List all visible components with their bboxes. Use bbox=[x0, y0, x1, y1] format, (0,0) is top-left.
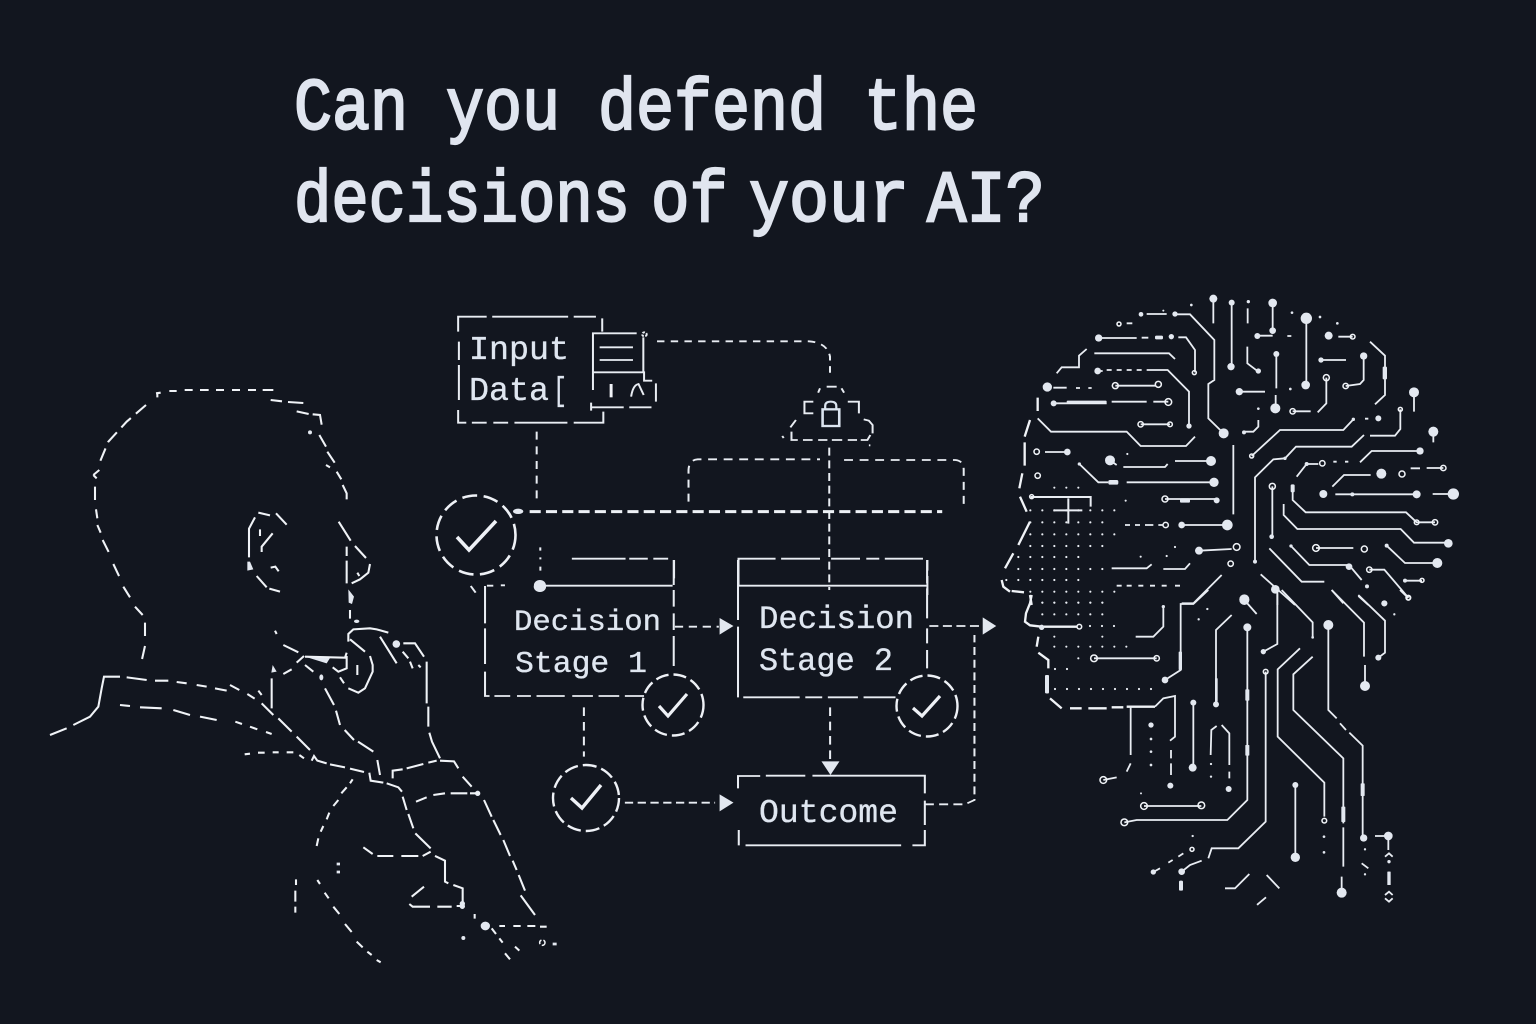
title: of bbox=[651, 160, 728, 243]
dot grid bbox=[1006, 454, 1175, 603]
nodes lower filled bbox=[1039, 595, 1395, 905]
ear bbox=[249, 513, 287, 592]
person: collar, shoulder and suit bbox=[50, 628, 557, 962]
icon: lock in cloud bbox=[782, 387, 873, 445]
stage 2 label: Stage 2 bbox=[759, 643, 893, 680]
decision flow diagram bbox=[436, 317, 996, 845]
input data label: Input bbox=[469, 332, 569, 369]
icon: document stack bbox=[591, 332, 656, 411]
circuit brain lower bbox=[1025, 590, 1410, 905]
title bbox=[294, 68, 1045, 243]
input data label: Data bbox=[469, 373, 549, 410]
illustration: AI head with circuit brain bbox=[1002, 295, 1459, 905]
connector: lock through gate to stage 2 bbox=[827, 448, 832, 590]
panel: input data bbox=[458, 317, 656, 423]
title: decisions bbox=[294, 160, 630, 243]
input data label bbox=[469, 332, 569, 410]
rounded dashed bracket bbox=[689, 459, 964, 505]
connector: input to check bbox=[534, 432, 539, 505]
stage 2 label: Decision bbox=[759, 601, 914, 638]
arrow: stage 2 to outcome bbox=[821, 707, 840, 775]
icon: check circle 2 bbox=[642, 674, 704, 736]
hand and chin bbox=[283, 628, 472, 787]
panel: outcome bbox=[738, 776, 925, 845]
arrow: check to outcome bbox=[625, 794, 734, 811]
title: your bbox=[749, 160, 909, 243]
icon: check circle 1 bbox=[436, 496, 516, 574]
nodes filled bbox=[1043, 295, 1459, 606]
stage 1 label bbox=[514, 606, 661, 682]
panel: decision stage 1 bbox=[471, 547, 704, 736]
arrow: stage 1 to stage 2 bbox=[675, 618, 734, 635]
connector: input to lock bbox=[657, 341, 830, 376]
dot grid lower bbox=[1042, 603, 1153, 689]
stage 1 label: Decision bbox=[514, 606, 661, 640]
icon: check circle 4 bbox=[553, 765, 619, 831]
face outline lower bbox=[1025, 595, 1155, 708]
stage 2 box bbox=[738, 559, 927, 697]
illustration: person in profile with hand on chin bbox=[50, 390, 557, 962]
input data label: [ bbox=[553, 373, 567, 410]
outcome label: Outcome bbox=[759, 795, 898, 832]
panel: decision stage 2 bbox=[738, 559, 958, 736]
circuit brain upper bbox=[1002, 295, 1459, 606]
title: AI? bbox=[927, 160, 1045, 243]
arm, lapel and jacket bbox=[317, 688, 535, 915]
icon: check circle 3 bbox=[896, 676, 958, 736]
stage 1 box bbox=[471, 547, 674, 696]
stage 1 label: Stage 1 bbox=[515, 647, 647, 682]
arrow: stage 1 down to check bbox=[581, 707, 587, 757]
nodes lower hollow bbox=[1077, 596, 1410, 851]
arrow: outcome and stage 2 to AI bbox=[925, 617, 996, 804]
stage 2 label bbox=[759, 601, 914, 680]
input data box bbox=[458, 317, 603, 423]
face outline upper bbox=[1002, 398, 1038, 605]
title: Can you defend the bbox=[294, 68, 978, 151]
traces lower bbox=[1103, 590, 1408, 904]
person: head, face and ear outline bbox=[93, 390, 370, 659]
nodes hollow bbox=[1030, 322, 1446, 600]
horizontal trunk line bbox=[513, 509, 942, 514]
traces bbox=[1038, 299, 1453, 605]
outcome box bbox=[738, 776, 925, 845]
crosshair bbox=[1031, 497, 1091, 524]
